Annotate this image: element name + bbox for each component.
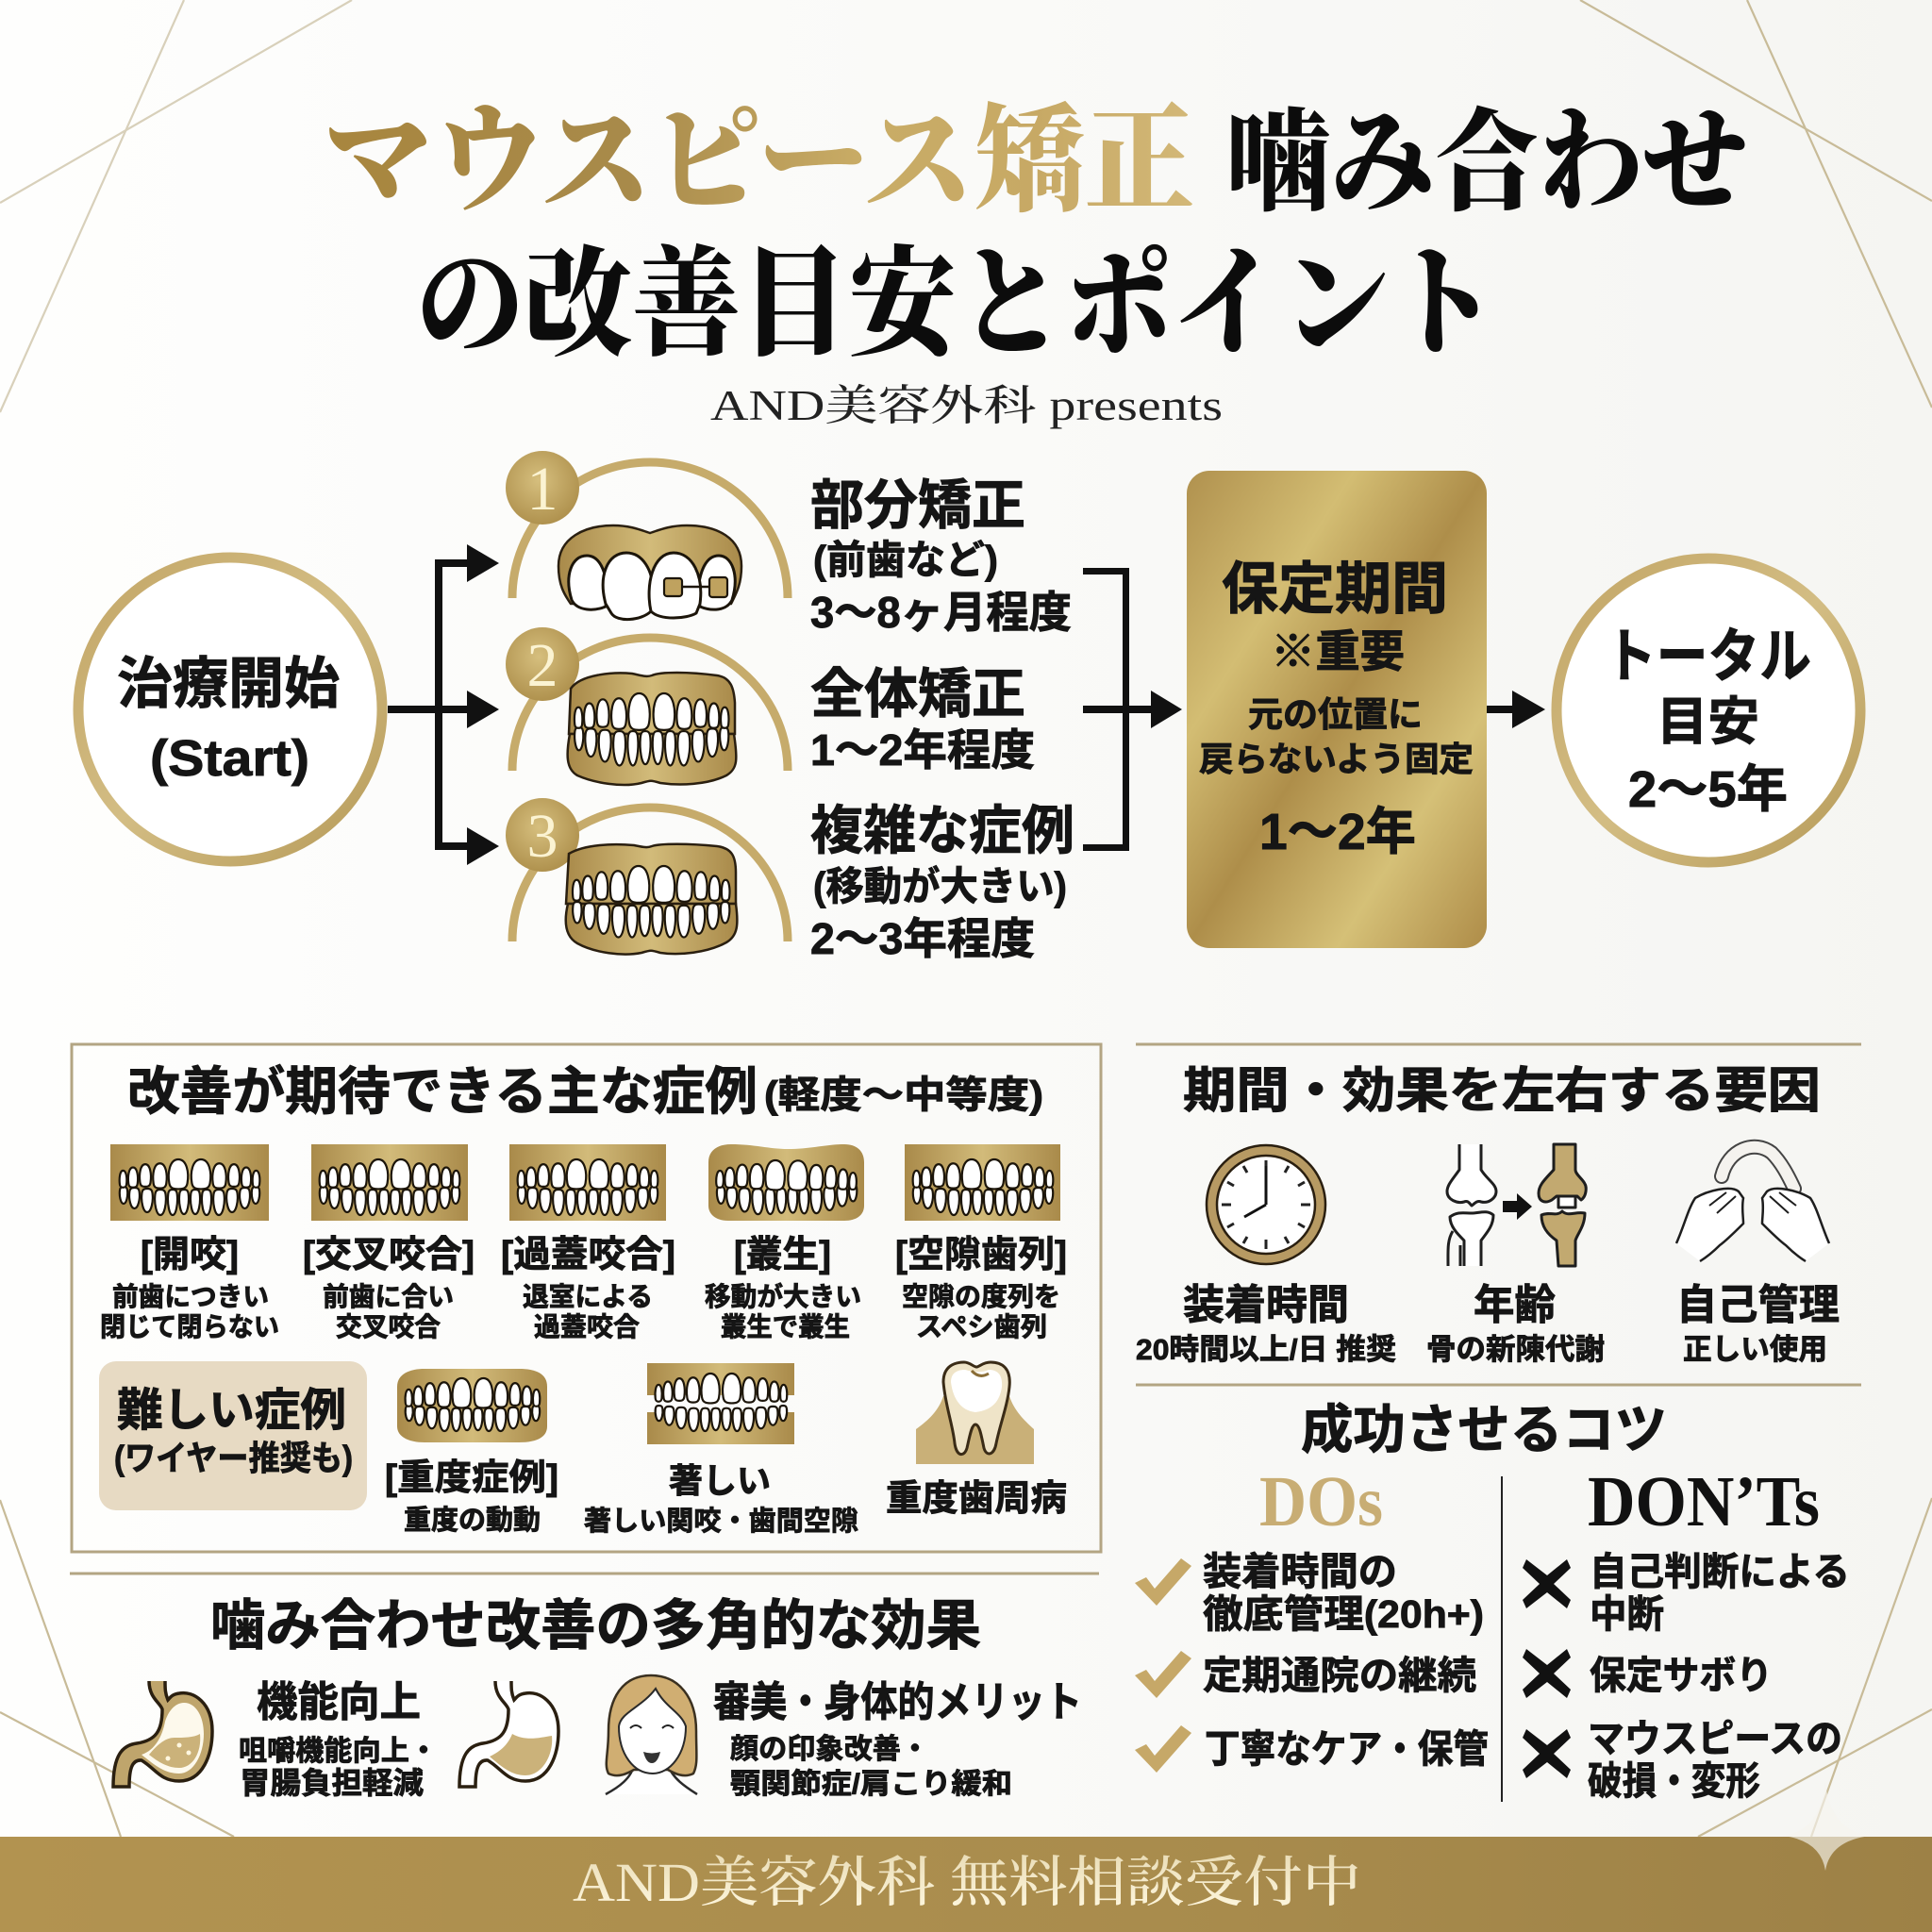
- option 3: complex case: [506, 798, 788, 955]
- heading: 改善が期待できる主な症例: [127, 1062, 758, 1121]
- option labels: 複雑な症例: [810, 801, 1074, 860]
- case: open bite: [100, 1144, 279, 1341]
- text: aesthetic benefits: 審美・身体的メリット: [713, 1679, 1082, 1725]
- text: functional improvement: [239, 1679, 438, 1800]
- case: crossbite: 交叉咬合: [336, 1312, 441, 1341]
- start circle: (Start): [150, 730, 309, 787]
- donts list: [1523, 1550, 1850, 1803]
- case: severe: [385, 1369, 558, 1536]
- icon: knee joints: [1447, 1144, 1586, 1266]
- factor labels: 自己管理: [1676, 1282, 1840, 1328]
- case: crowding: 移動が大きい: [705, 1281, 861, 1311]
- option labels: 3〜8ヶ月程度: [810, 588, 1072, 637]
- difficult cases callout: 難しい症例: [117, 1386, 346, 1436]
- section: tips for success: [1135, 1385, 1861, 1803]
- retention period box: 戻らないよう固定: [1199, 740, 1474, 778]
- donts list: 破損・変形: [1588, 1759, 1760, 1803]
- retention period box: 保定期間: [1222, 558, 1448, 621]
- icon: misaligned teeth: [566, 844, 737, 955]
- factor labels: 年齢: [1474, 1282, 1556, 1328]
- option labels: (移動が大きい): [813, 864, 1067, 908]
- retention period box: [1187, 471, 1487, 948]
- icon: hands with aligner: [1676, 1147, 1829, 1261]
- icon: smiling woman: [606, 1675, 697, 1794]
- arrow to total: [1487, 691, 1545, 728]
- factor labels: 骨の新陳代謝: [1426, 1333, 1605, 1366]
- case: periodontal disease: 重度歯周病: [886, 1479, 1067, 1519]
- case: crowding: 叢生で叢生: [721, 1312, 850, 1341]
- option labels: 1〜2年程度: [810, 725, 1035, 774]
- retention period box: ※重要: [1271, 626, 1405, 676]
- case: overbite: 過蓋咬合: [534, 1312, 640, 1341]
- donts list: 自己判断による: [1590, 1550, 1850, 1593]
- title: の改善目安とポイント: [416, 241, 1497, 372]
- case: overbite: [過蓋咬合]: [501, 1235, 675, 1275]
- case: overbite: 退室による: [523, 1282, 653, 1311]
- option labels: 全体矯正: [810, 664, 1025, 724]
- total circle: 2〜5年: [1628, 761, 1788, 818]
- icon: front teeth with bracket: [558, 525, 741, 620]
- heading: DON'Ts: DON’Ts: [1588, 1462, 1820, 1541]
- factor labels: 正しい使用: [1683, 1333, 1827, 1366]
- option 2: full correction: 2: [526, 631, 558, 700]
- option labels: [810, 475, 1074, 963]
- icon: full dentition: [568, 673, 736, 785]
- section: factors: 期間・効果を左右する要因: [1183, 1064, 1821, 1119]
- dos list: 定期通院の継続: [1203, 1654, 1476, 1697]
- text: functional improvement: 機能向上: [257, 1679, 421, 1725]
- case: crossbite: 前歯に合い: [323, 1282, 454, 1311]
- factor labels: 20時間以上/日 推奨: [1136, 1333, 1396, 1366]
- case: severe: 重度の動動: [404, 1505, 541, 1536]
- option 1: partial correction: 1: [526, 455, 558, 524]
- option labels: (前歯など): [813, 538, 998, 582]
- subtitle: AND美容外科 presents: [710, 382, 1223, 429]
- case: crowding: [叢生]: [734, 1235, 831, 1275]
- text: aesthetic benefits: 顎関節症/肩こり緩和: [730, 1769, 1012, 1800]
- option 2: full correction: [506, 627, 788, 785]
- dos list: 丁寧なケア・保管: [1205, 1727, 1489, 1771]
- icon: clock: [1207, 1145, 1325, 1264]
- footer band: AND美容外科 無料相談受付中: [573, 1852, 1361, 1913]
- dos list: 装着時間の: [1203, 1550, 1397, 1593]
- text: aesthetic benefits: 顔の印象改善・: [730, 1734, 929, 1765]
- icon: stomach: [459, 1681, 558, 1787]
- text: functional improvement: 胃腸負担軽減: [240, 1766, 424, 1800]
- icon: stomach with food: [113, 1681, 212, 1787]
- case: marked: 著しい: [669, 1461, 771, 1500]
- case: spacing: スペシ歯列: [916, 1312, 1047, 1341]
- text: aesthetic benefits: [713, 1679, 1082, 1800]
- retention period box: 元の位置に: [1248, 695, 1423, 734]
- merge bracket arrow: [1083, 568, 1182, 851]
- title: 噛み合わせ: [1226, 102, 1747, 225]
- total circle: 目安: [1657, 692, 1759, 751]
- title: マウスピース矯正: [323, 97, 1195, 226]
- footer band: [0, 1837, 1932, 1932]
- panel: expected cases: [72, 1044, 1101, 1552]
- factor labels: 装着時間: [1183, 1282, 1349, 1328]
- donts list: 保定サボり: [1590, 1654, 1773, 1697]
- branching arrows: [388, 544, 499, 865]
- option 3: complex case: 3: [526, 802, 558, 871]
- case: spacing: [空隙歯列]: [895, 1235, 1067, 1275]
- heading: (軽度〜中等度): [764, 1074, 1043, 1116]
- option labels: 部分矯正: [810, 475, 1025, 536]
- total circle: [1557, 558, 1860, 862]
- heading: [127, 1062, 1043, 1121]
- heading: DOs: DOs: [1259, 1462, 1383, 1541]
- section: multifaceted effects: 噛み合わせ改善の多角的な効果: [210, 1595, 981, 1657]
- dos list: [1135, 1550, 1489, 1773]
- start circle: 治療開始: [117, 653, 340, 715]
- case: crowding: [705, 1144, 864, 1341]
- case: crossbite: [交叉咬合]: [303, 1235, 475, 1275]
- donts list: マウスピースの: [1588, 1717, 1842, 1760]
- total circle: トータル: [1605, 625, 1811, 690]
- title: [323, 97, 1747, 372]
- retention period box: 1〜2年: [1259, 804, 1416, 860]
- case: open bite: 閉じて閉らない: [100, 1312, 279, 1341]
- case: spacing: [895, 1144, 1067, 1341]
- case: marked: [584, 1363, 858, 1537]
- case: overbite: [501, 1144, 675, 1341]
- case: severe: [重度症例]: [385, 1458, 558, 1498]
- option labels: 2〜3年程度: [810, 914, 1035, 963]
- section: multifaceted effects: [70, 1574, 1099, 1800]
- case: crossbite: [303, 1144, 475, 1341]
- donts list: 中断: [1590, 1592, 1664, 1636]
- case: open bite: 前歯につきい: [112, 1282, 269, 1311]
- start circle: [78, 558, 382, 861]
- difficult cases callout: (ワイヤー推奨も): [114, 1439, 353, 1477]
- text: functional improvement: 咀嚼機能向上・: [239, 1736, 438, 1767]
- factor labels: [1136, 1282, 1840, 1366]
- section: factors: [1136, 1044, 1861, 1366]
- section: tips for success: 成功させるコツ: [1301, 1400, 1667, 1459]
- case: marked: 著しい関咬・歯間空隙: [584, 1506, 858, 1537]
- sparkle star: [1783, 1782, 1871, 1871]
- dos list: 徹底管理(20h+): [1203, 1592, 1484, 1636]
- case: open bite: [開咬]: [141, 1235, 239, 1275]
- case: periodontal disease: [886, 1362, 1067, 1519]
- case: spacing: 空隙の度列を: [902, 1282, 1060, 1311]
- difficult cases callout: [99, 1361, 367, 1510]
- option 1: partial correction: [506, 451, 788, 620]
